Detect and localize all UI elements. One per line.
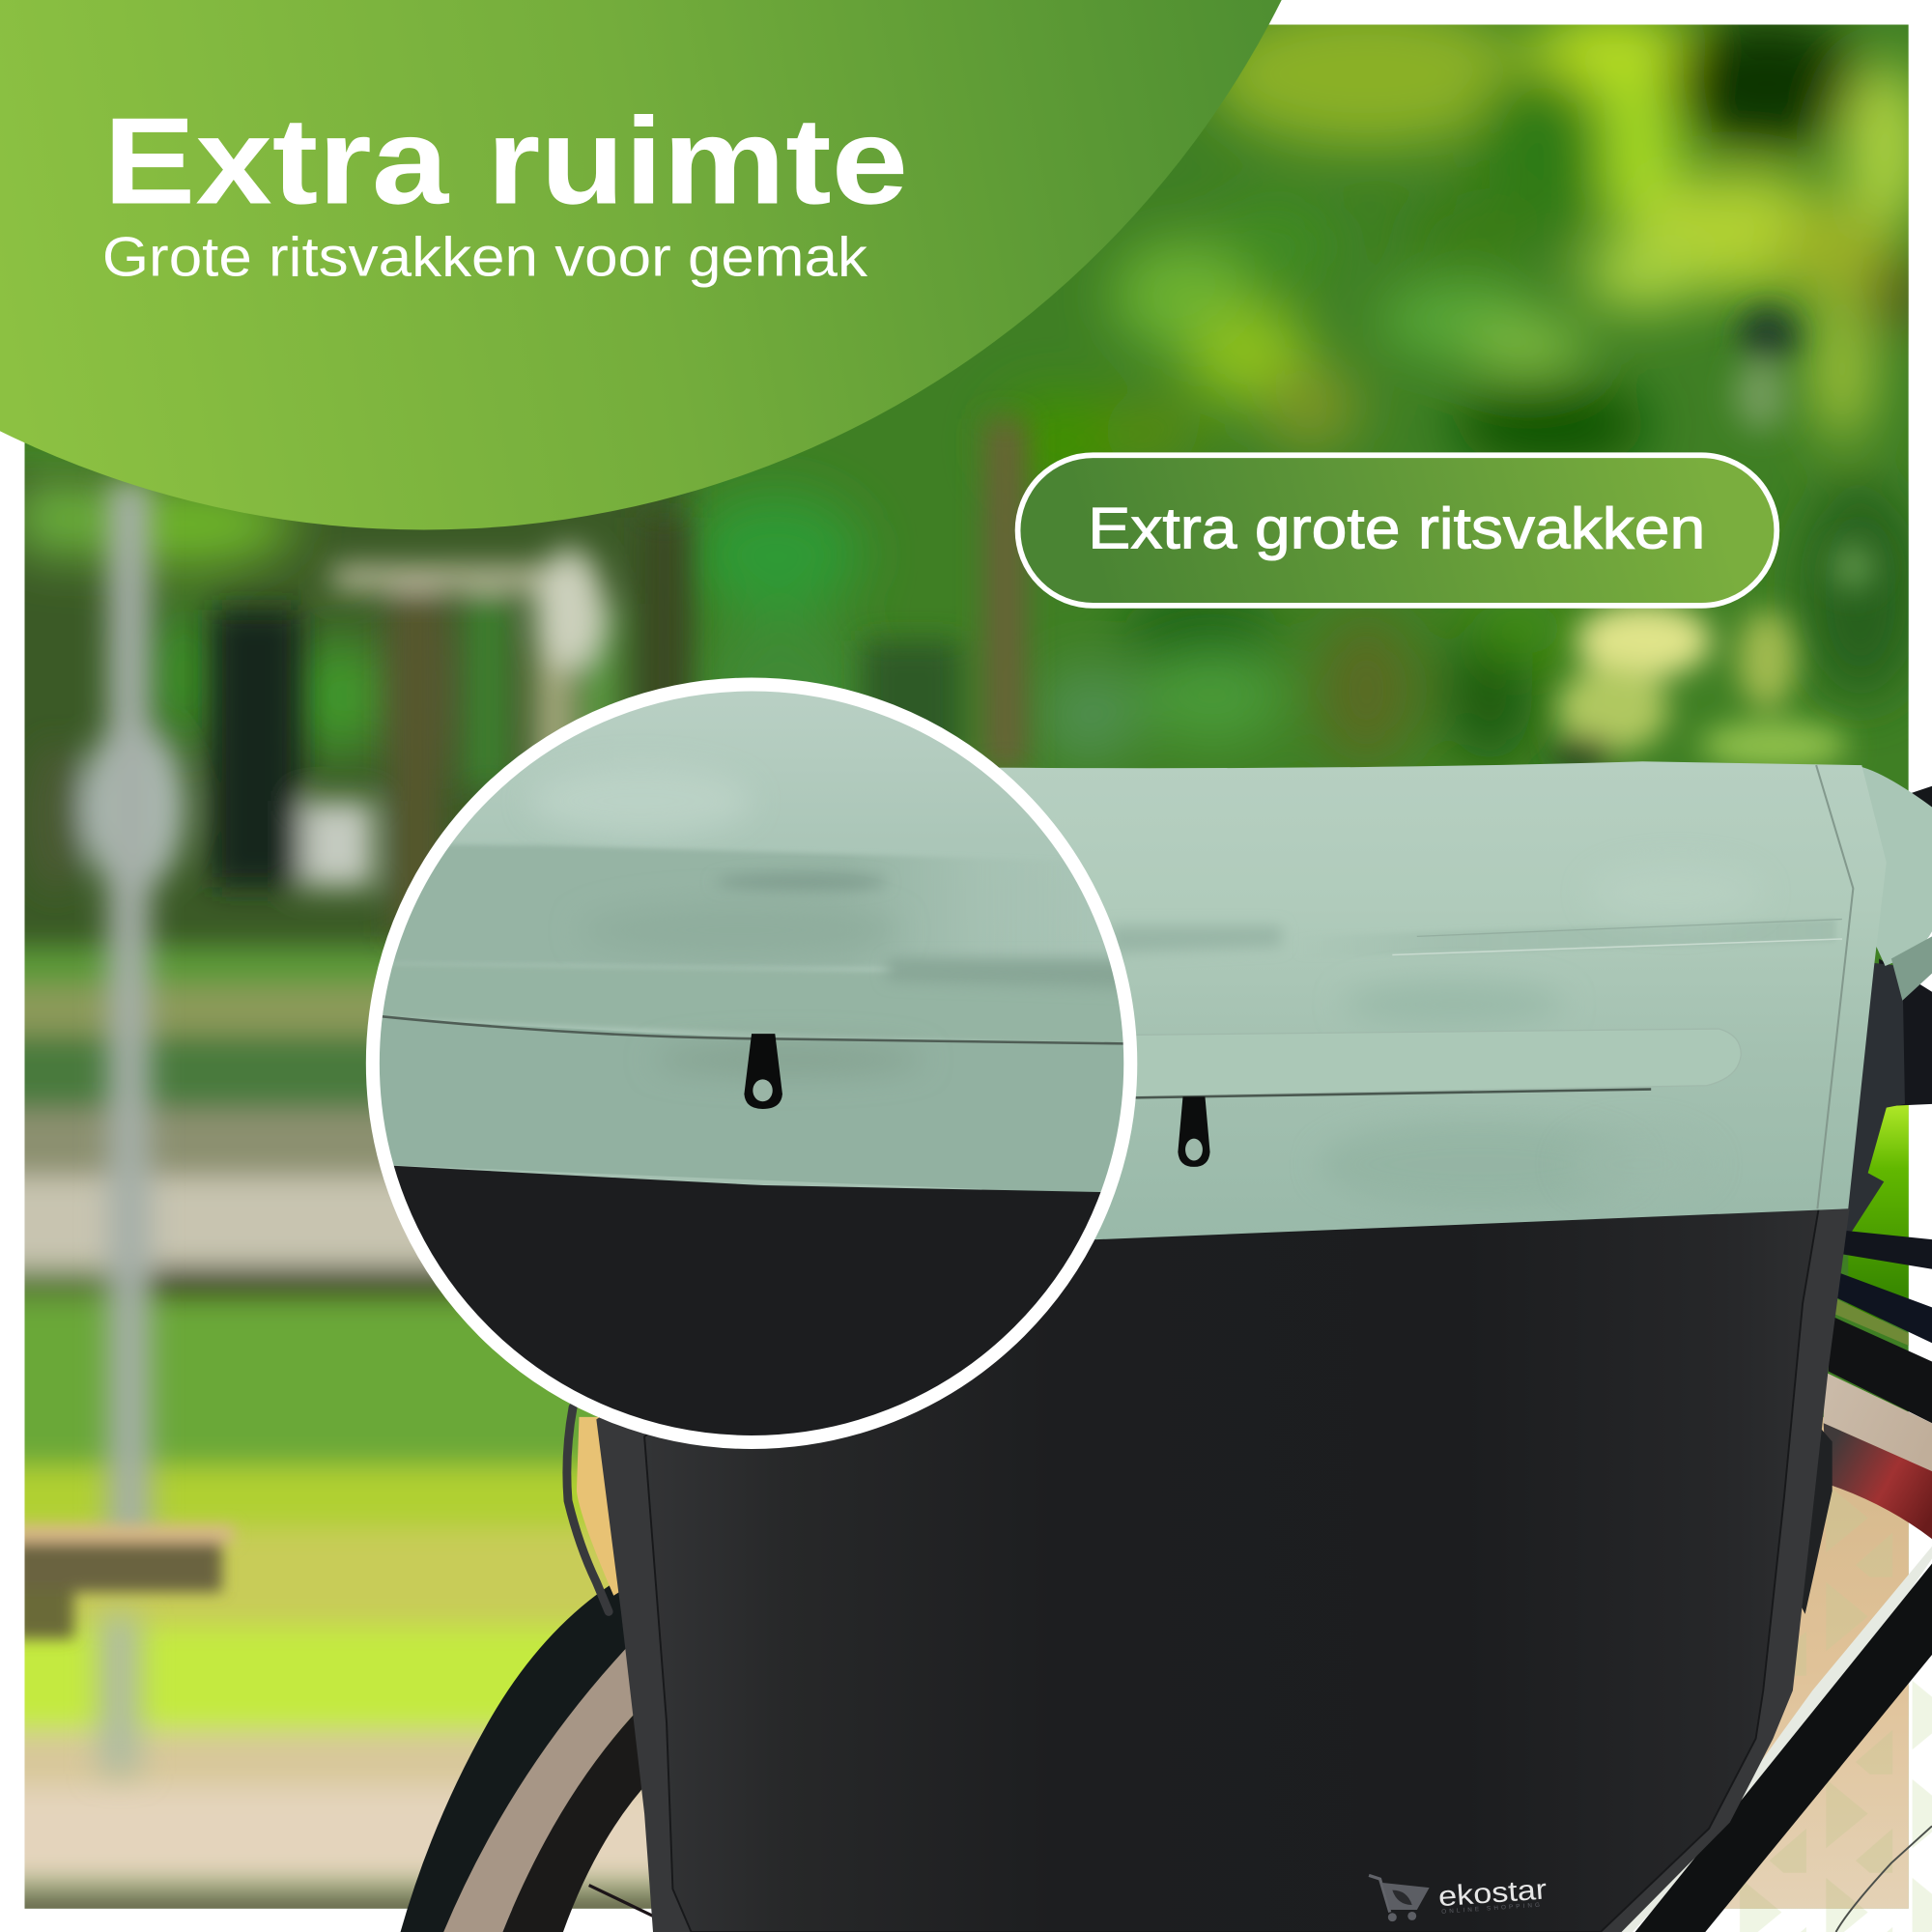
- zip line: [382, 1016, 1123, 1043]
- bicycle rear wheel left: [401, 1577, 666, 1932]
- subtitle: Grote ritsvakken voor gemak: [102, 227, 867, 289]
- tab underside line: [1127, 1090, 1651, 1097]
- magnified zipper pull: [744, 1034, 782, 1109]
- diagonal frame tube: [1635, 1564, 1932, 1932]
- rear rim red shadow: [1824, 1423, 1932, 1539]
- lower pocket: [370, 1018, 1133, 1195]
- spoke: [589, 1886, 653, 1916]
- flap lower band: [370, 963, 1133, 1047]
- rack and wheel at right: [1622, 786, 1932, 1932]
- pocket shadow: [653, 1045, 924, 1074]
- circle ring: [373, 685, 1130, 1442]
- flap band: [370, 844, 1133, 969]
- green header shape: [0, 0, 1383, 529]
- flap edge stitching: [1816, 765, 1853, 1208]
- brand tagline: ONLINE SHOPPING: [1441, 1902, 1540, 1916]
- brand name: ekostar: [1437, 1873, 1548, 1913]
- light fan highlight: [529, 766, 752, 836]
- knotted strap: [1845, 963, 1905, 1232]
- magnifier circle: [370, 678, 1133, 1454]
- wheel strut: [1799, 1423, 1833, 1614]
- bag body inner panel: [644, 1208, 1819, 1932]
- mint flap: [863, 761, 1887, 1239]
- icon: shopping cart with leaf: [1369, 1875, 1430, 1921]
- black section: [370, 1164, 1133, 1454]
- rim: [443, 1620, 653, 1932]
- flap shading: [1109, 864, 1836, 1208]
- callout pill: [1018, 455, 1776, 606]
- magnified bag: [370, 678, 1133, 1454]
- left strap on bag: [567, 1407, 609, 1611]
- lower roll shadow: [1891, 936, 1932, 1001]
- black lower body: [596, 1208, 1850, 1932]
- pannier bag: [596, 761, 1932, 1932]
- upper fold line: [1417, 920, 1842, 936]
- dark strap block: [1879, 958, 1932, 1106]
- ground behind bike: [1724, 1416, 1909, 1909]
- rear rim silver: [1824, 1372, 1932, 1471]
- rear tire: [1829, 1315, 1932, 1423]
- diagonal frame highlight: [1622, 1547, 1932, 1932]
- bright green gap behind rack: [1848, 1104, 1909, 1320]
- logo: ekostar: [1369, 1873, 1548, 1921]
- rack band one: [1836, 1230, 1932, 1269]
- rack strap top: [1911, 786, 1932, 808]
- band right shadow: [887, 958, 1133, 988]
- closure tab: [1127, 1029, 1741, 1096]
- title: Extra ruimte: [103, 93, 908, 230]
- rear roll fold: [1848, 765, 1932, 966]
- tire: [401, 1577, 666, 1932]
- callout label: Extra grote ritsvakken: [1088, 497, 1705, 561]
- olive strip: [1833, 1297, 1909, 1346]
- zipper pull: [1178, 1096, 1210, 1167]
- thin cable: [1836, 1826, 1932, 1932]
- decorative pattern corner: [1725, 1627, 1932, 1932]
- ground triangles: [1740, 1603, 1892, 1909]
- flap seam line: [1392, 939, 1842, 955]
- rack band two: [1836, 1271, 1932, 1343]
- dark crease: [715, 873, 887, 891]
- warm gap behind strap: [577, 1417, 623, 1596]
- inner rim band: [502, 1694, 653, 1932]
- center shadow: [579, 903, 899, 957]
